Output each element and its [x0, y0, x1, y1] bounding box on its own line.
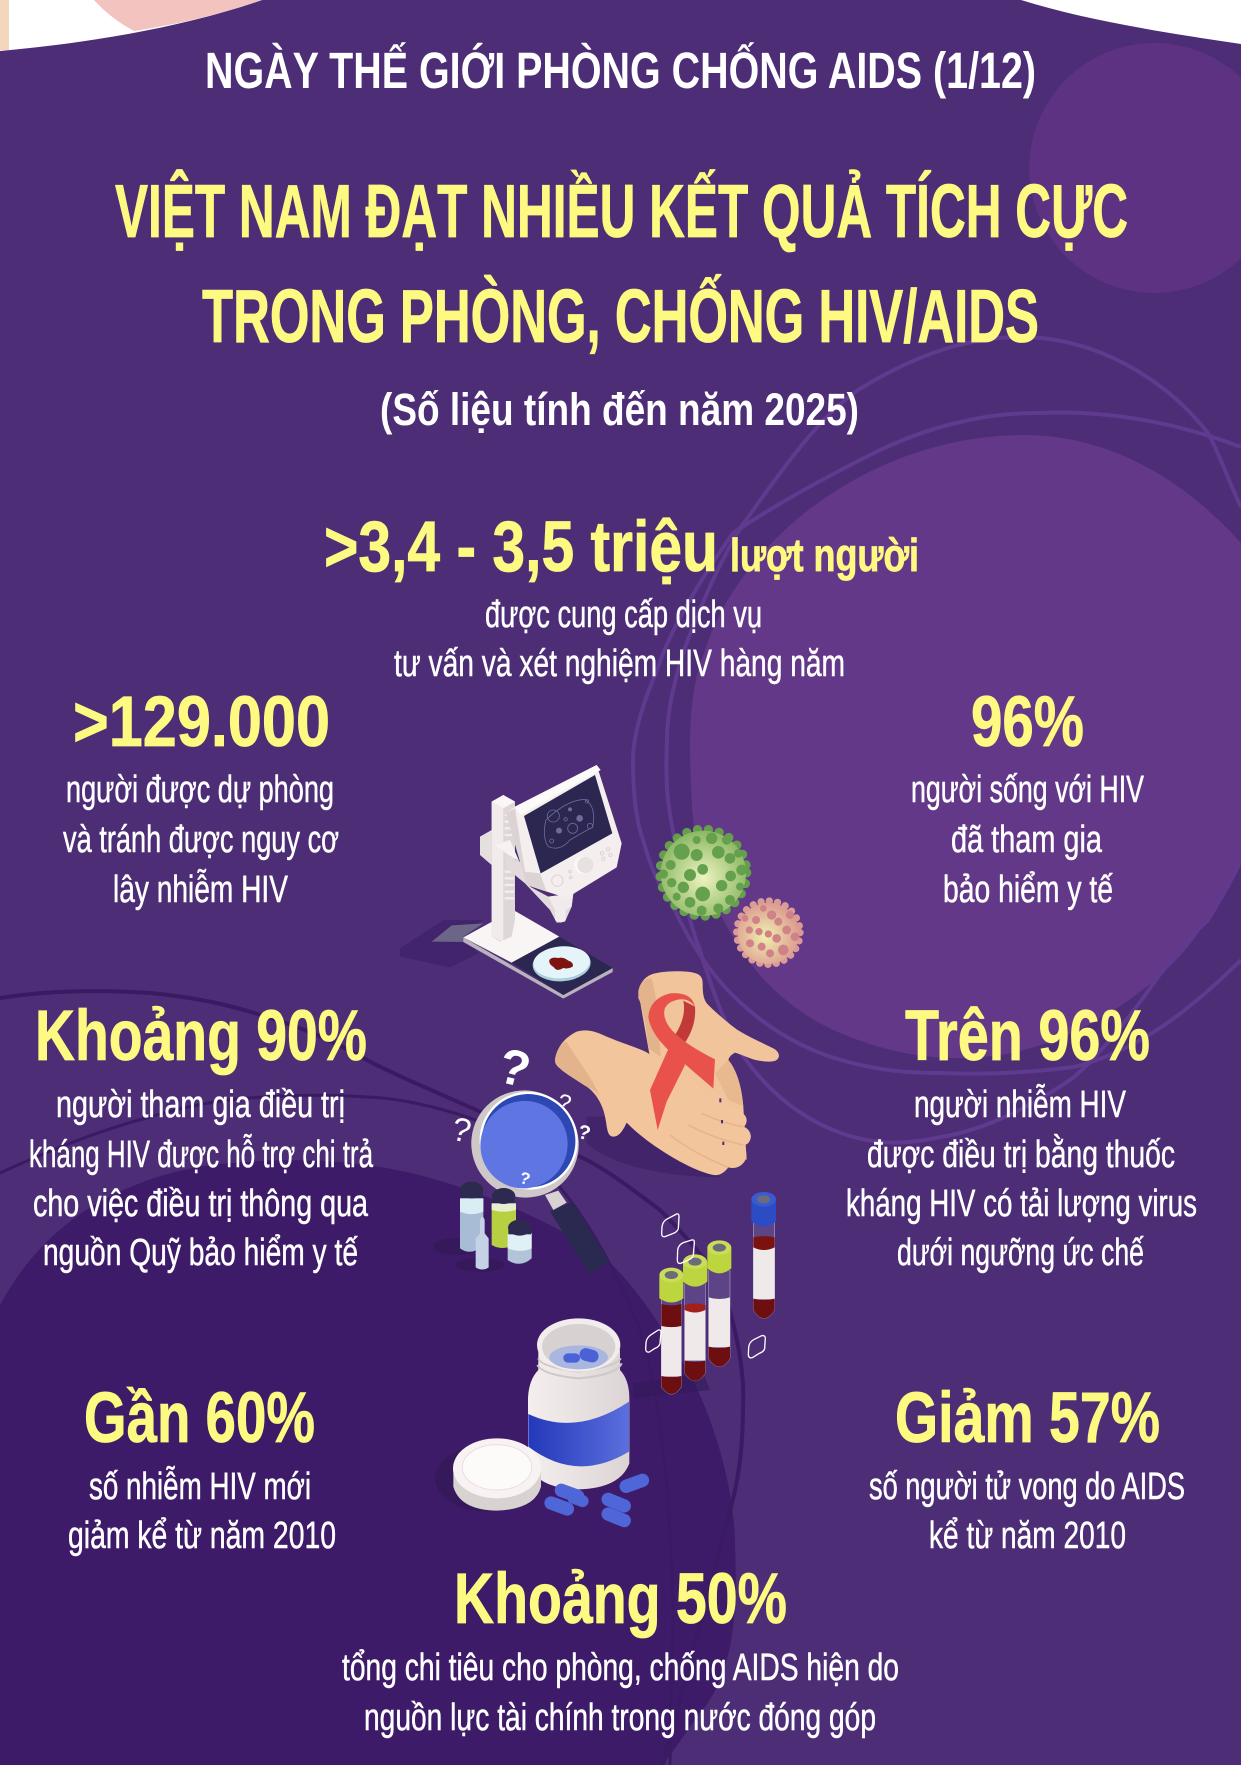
icon: question marks: ? — [575, 1121, 593, 1145]
description: người được dự phòng — [66, 769, 334, 811]
value: Trên 96% — [905, 997, 1150, 1076]
description: nguồn lực tài chính trong nước đóng góp — [364, 1697, 876, 1739]
icon: magnifying glass — [449, 1068, 601, 1220]
stat: treatment funding — [29, 997, 374, 1274]
icon: green virus — [659, 829, 747, 916]
subtitle: (Số liệu tính đến năm 2025) — [380, 384, 859, 435]
stat: insurance — [911, 683, 1144, 911]
value: 96% — [971, 683, 1084, 762]
stat: deaths — [869, 1379, 1185, 1557]
title block — [115, 41, 1128, 435]
description: đã tham gia — [951, 819, 1103, 861]
icon: magnifier handle — [545, 1191, 609, 1275]
icon: bottle cap — [453, 1438, 541, 1511]
illustration: upper group — [400, 765, 800, 1220]
description: lây nhiễm HIV — [113, 868, 288, 911]
description — [342, 1647, 899, 1739]
value: >3,4 - 3,5 triệu — [324, 508, 718, 587]
icon: hands with red ribbon — [555, 971, 779, 1177]
description: cho việc điều trị thông qua — [33, 1183, 369, 1225]
description: người sống với HIV — [911, 769, 1144, 811]
description: kể từ năm 2010 — [929, 1515, 1126, 1557]
value: Khoảng 50% — [454, 1560, 787, 1639]
description: bảo hiểm y tế — [943, 869, 1113, 911]
icon: vials — [433, 1182, 532, 1272]
description: nguồn Quỹ bảo hiểm y tế — [43, 1232, 358, 1274]
description — [846, 1083, 1197, 1274]
description — [29, 1084, 374, 1274]
icon: blood tubes — [633, 1192, 776, 1398]
icon: question marks — [448, 1037, 593, 1151]
stat: domestic spending — [342, 1560, 899, 1739]
stat: viral suppression — [846, 997, 1197, 1274]
stat: testing — [324, 508, 919, 685]
description: người nhiễm HIV — [914, 1083, 1126, 1126]
description: được cung cấp dịch vụ — [485, 594, 762, 636]
description — [394, 594, 845, 685]
stat: prevention — [63, 683, 339, 911]
icon: magnifying glass: ? — [518, 1168, 532, 1189]
icon: blue pills — [543, 1472, 651, 1529]
icon: pill bottle — [435, 1318, 629, 1512]
description: kháng HIV được hỗ trợ chi trả — [29, 1133, 374, 1176]
description: và tránh được nguy cơ — [63, 819, 339, 861]
description: tư vấn và xét nghiệm HIV hàng năm — [394, 643, 845, 685]
unit: lượt người — [730, 529, 919, 581]
description: dưới ngưỡng ức chế — [897, 1232, 1144, 1274]
description: người tham gia điều trị — [56, 1084, 345, 1126]
description: giảm kể từ năm 2010 — [68, 1515, 336, 1557]
icon: microscope — [400, 765, 622, 999]
stat: new infections — [68, 1379, 336, 1557]
value: Giảm 57% — [895, 1379, 1160, 1458]
icon: question marks: ? — [448, 1111, 474, 1151]
value: Khoảng 90% — [35, 997, 367, 1076]
description — [68, 1465, 336, 1557]
icon: question marks: ? — [556, 1089, 574, 1117]
value: Gần 60% — [84, 1379, 315, 1458]
description: tổng chi tiêu cho phòng, chống AIDS hiện do — [342, 1647, 899, 1689]
description — [911, 769, 1144, 911]
description — [869, 1466, 1185, 1557]
icon: pink virus — [737, 901, 800, 964]
icon: question marks: ? — [493, 1037, 536, 1099]
description — [63, 769, 339, 911]
illustration: lower group — [433, 1182, 776, 1529]
value: >129.000 — [73, 683, 330, 762]
description: số nhiễm HIV mới — [89, 1465, 311, 1508]
